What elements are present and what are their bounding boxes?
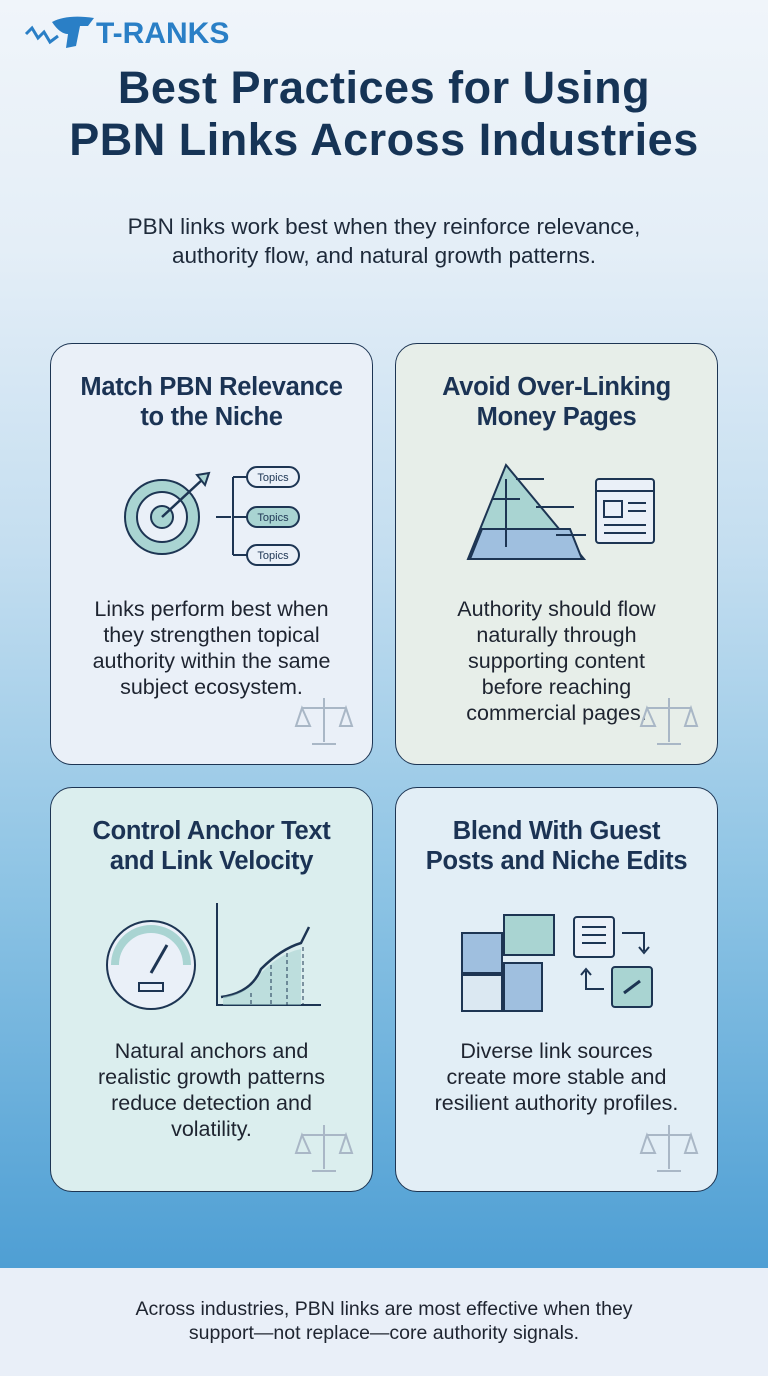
icon: target with topics: Topics	[257, 550, 289, 562]
panel: relevance: they strengthen topical	[103, 623, 320, 647]
panel: relevance: authority within the same	[93, 649, 330, 673]
panel: anchor text: and Link Velocity	[110, 847, 313, 875]
panel: anchor text: volatility.	[171, 1117, 252, 1141]
panel: relevance: Match PBN Relevance	[80, 373, 343, 401]
panel: anchor text: Control Anchor Text	[93, 817, 330, 845]
icon: target with topics	[124, 466, 300, 566]
footer: support—not replace—core authority signals.	[189, 1322, 579, 1344]
logo	[25, 16, 229, 50]
panel: relevance: to the Niche	[140, 403, 283, 431]
panel: blend: Posts and Niche Edits	[426, 847, 687, 875]
panel: anchor text: reduce detection and	[111, 1091, 312, 1115]
panel: blend: create more stable and	[447, 1065, 666, 1089]
panel: over-linking: Avoid Over-Linking	[442, 373, 671, 401]
icon: target with topics: Topics	[257, 512, 289, 524]
footer: Across industries, PBN links are most effective when they	[135, 1298, 633, 1320]
panel: anchor text	[50, 787, 373, 1192]
panel: blend	[395, 787, 718, 1192]
icon: puzzle and link cycle	[461, 914, 653, 1012]
subtitle	[128, 214, 640, 268]
panel: over-linking: Money Pages	[477, 403, 636, 431]
panel: blend: Blend With Guest	[453, 817, 660, 845]
icon: scale	[640, 698, 698, 745]
panel: relevance	[50, 343, 373, 765]
panel: blend: Diverse link sources	[460, 1039, 653, 1063]
icon: scale	[640, 1125, 698, 1172]
panel: over-linking: naturally through	[476, 623, 637, 647]
logo: T-RANKS	[96, 17, 229, 50]
icon: scale	[294, 1125, 354, 1172]
panel: blend: resilient authority profiles.	[435, 1091, 678, 1115]
title	[69, 62, 699, 165]
panel: over-linking: supporting content	[468, 649, 645, 673]
icon: pyramid with page	[466, 463, 655, 560]
icon: target with topics: Topics	[257, 472, 289, 484]
panel: over-linking: before reaching	[482, 675, 631, 699]
title: PBN Links Across Industries	[69, 114, 699, 165]
icon: gauge and growth chart	[106, 903, 321, 1010]
title: Best Practices for Using	[118, 62, 650, 113]
panel: relevance: Links perform best when	[94, 597, 329, 621]
panel: over-linking: Authority should flow	[457, 597, 656, 621]
subtitle: authority flow, and natural growth patterns.	[172, 243, 596, 268]
panel: anchor text: realistic growth patterns	[98, 1065, 325, 1089]
footer	[0, 1268, 768, 1376]
panel: over-linking: commercial pages.	[466, 701, 647, 725]
panel: anchor text: Natural anchors and	[115, 1039, 308, 1063]
panel: over-linking	[395, 343, 718, 765]
panel: relevance: subject ecosystem.	[120, 675, 303, 699]
subtitle: PBN links work best when they reinforce relevance,	[128, 214, 640, 239]
icon: scale	[294, 698, 354, 745]
